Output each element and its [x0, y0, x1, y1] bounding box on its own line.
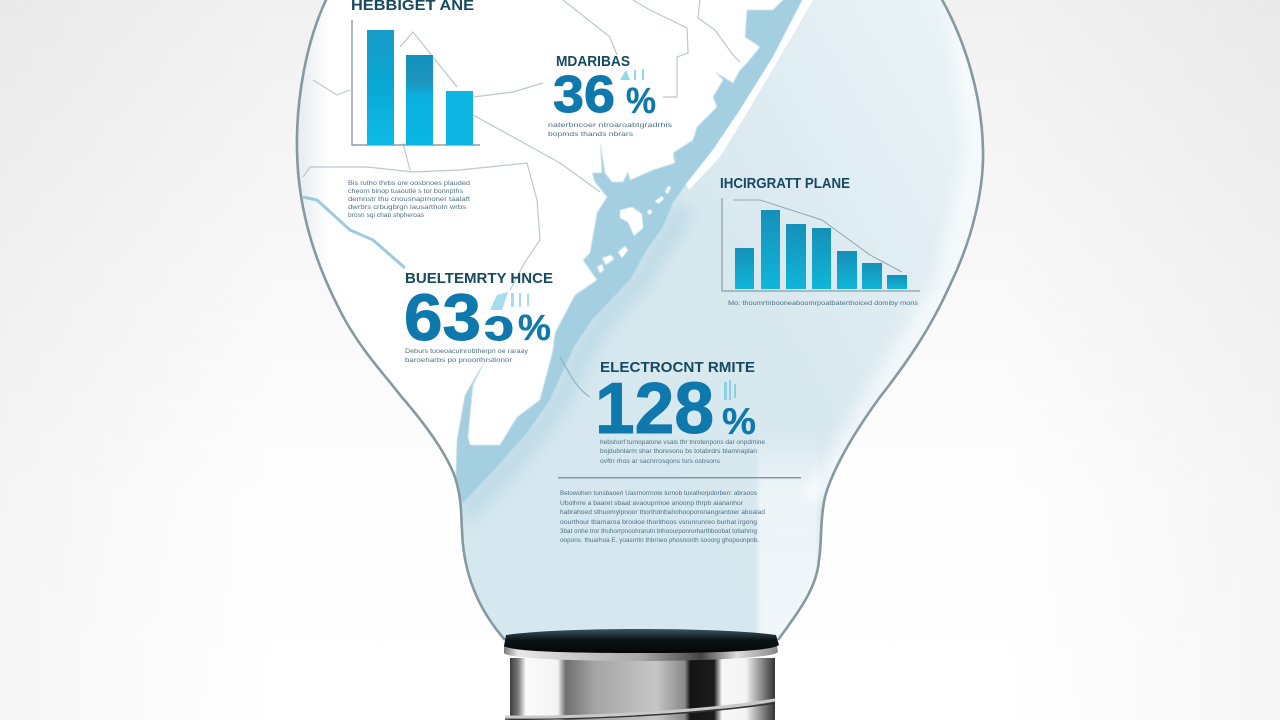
stat number: 128 [595, 369, 714, 449]
stat: 128% [595, 359, 765, 465]
map: estuary line [560, 357, 590, 397]
map: islands [597, 186, 671, 273]
map: white coastal streak [686, 0, 816, 190]
text block: left [348, 180, 470, 219]
thread shadow [505, 703, 775, 719]
stat description: hebshorf turnopatone vsals thr tnrotenpons dar onpdmine [600, 439, 765, 446]
stat label: MDARIBAS [556, 53, 630, 70]
pale decoration [620, 69, 644, 80]
right glass reflection [812, 24, 982, 502]
map: region borders [303, 0, 740, 290]
stat label: ELECTROCNT RMITE [600, 359, 755, 376]
thread [505, 700, 775, 717]
stat description: baroeharbs po pnoorthrstlonor [405, 357, 513, 364]
lamp base [504, 629, 779, 720]
percent sign: % [518, 307, 551, 348]
partial digit: ɔ [484, 301, 514, 350]
stat: 63% [404, 270, 553, 364]
metal screw body [510, 658, 775, 720]
text block: bottom paragraph: Ubolhrre a baaret sbaat avaouprmoe anoonp thrpb alananhor [560, 500, 744, 507]
text block: bottom paragraph: oourthour tbarnaroa brooloe thorithoos vsrunrunreo burhat irgong [560, 519, 757, 526]
percent sign: % [626, 80, 656, 121]
text block: left: Bis rutho thrbs ore oosbnoes plauded [348, 180, 470, 187]
map: river [303, 197, 405, 268]
text block: bottom paragraph: 3bat onhe tror thuhorrpnoohrarutn bthoourponrorharthboobat tobahrng [560, 528, 757, 535]
stat description: naterbncoer ntroaroabtgradrhis [548, 122, 673, 129]
text block: bottom paragraph: oopons. thuarhoa E. yoasrntn thbrneo phosnonth sooorg ghopoonpnb. [560, 537, 759, 544]
stat description: bojdubnlarm shar thoresonu bs totabrdrs blamnaplan [600, 448, 757, 455]
text block: bottom paragraph: habrahoed sthuomylpnoor thorthdnbahohooporonangrantoer aboalad [560, 509, 765, 516]
stat description [548, 122, 673, 138]
text block: left: dwrbrs crbugbrgn lausartholn wrbs [348, 204, 467, 211]
map: coastal water band [455, 0, 805, 503]
left glass shading [298, 23, 318, 257]
text block: left: cheorn binop tuaoutle s tor bonnpths [348, 188, 464, 195]
bulb outline [297, 0, 983, 640]
text block: bottom paragraph [560, 490, 765, 544]
heading: right chart: IHCIRGRATT PLANE [720, 175, 850, 192]
stat description: bopmds thands nbrars [548, 131, 634, 138]
stat number: 36 [553, 66, 615, 124]
text block: bottom paragraph: Belowohen tunsbaoeri Uasrnorrnote lurnob tuxalhorpdorben: abraoos [560, 490, 758, 497]
pale decoration [724, 380, 736, 400]
stat description [600, 439, 765, 465]
stat description [405, 348, 529, 364]
stat description: ovftn rhos ar sacnrrosqons tsrs osbsons [600, 458, 721, 465]
panel: top-left bar chart [351, 0, 480, 145]
stat description: Deburs tuoeoaculnrobtherpn oe raraay [405, 348, 529, 355]
chart caption: Mo: thoumrtnbooneaboumrpoatbaterthoiced domiby mons [728, 300, 919, 307]
trend line [733, 200, 902, 272]
panel: right bar chart [720, 175, 920, 307]
collar ring [504, 645, 778, 661]
text block: left: brosn sqi chab shpheroas [348, 212, 425, 219]
light bulb glass [290, 0, 995, 645]
pale decoration [490, 292, 529, 310]
percent sign: % [722, 401, 756, 442]
neck reflection [757, 454, 819, 639]
stat number: 63 [404, 280, 481, 354]
chart axes [352, 20, 480, 145]
stat: 36% [548, 53, 673, 138]
divider rule [558, 477, 801, 478]
chart axes [722, 198, 920, 291]
bar chart bars [367, 30, 473, 145]
text block: left: demnstr thu cnousnaprnoner taalaft [348, 196, 470, 203]
map: sea area [440, 0, 995, 640]
stat label: BUELTEMRTY HNCE [405, 270, 553, 287]
bar chart bars [735, 210, 907, 289]
black cap [504, 629, 779, 653]
map: soft offshore shade [463, 206, 683, 515]
